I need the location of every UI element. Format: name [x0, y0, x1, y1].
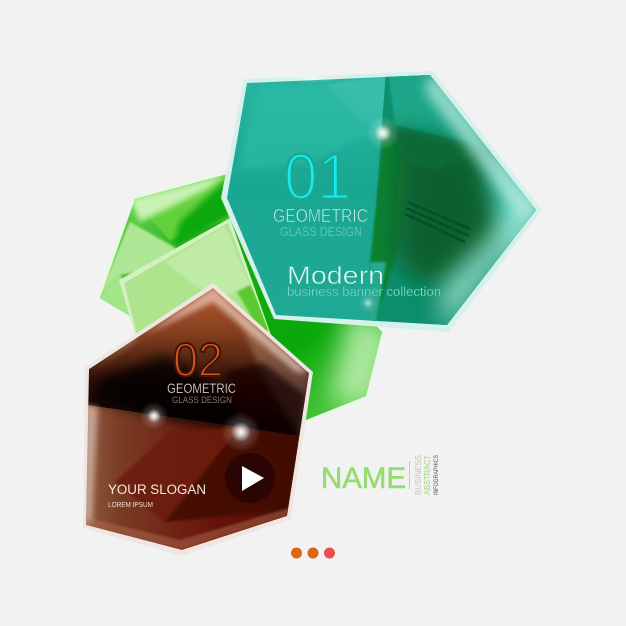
text: ABSTRACT: ABSTRACT	[422, 455, 432, 495]
lens flare: top right	[366, 116, 400, 150]
lens flare: top edge	[284, 73, 340, 83]
heading: Modern: Modern	[287, 262, 384, 290]
glass reflection facets	[240, 319, 309, 436]
panel: teal hexagon 01	[221, 70, 560, 340]
text: business banner collection: business banner collection	[287, 284, 441, 299]
lens flare: left	[140, 402, 168, 430]
number 02: 02	[173, 333, 223, 386]
subheading: GLASS DESIGN: GLASS DESIGN	[172, 395, 232, 406]
text: NAME: NAME	[321, 462, 406, 495]
text: BUSINESS: BUSINESS	[413, 455, 423, 495]
heading: GEOMETRIC: GEOMETRIC	[167, 380, 236, 396]
dark band shadow	[95, 355, 304, 437]
logo: NAME	[321, 454, 440, 495]
heading: YOUR SLOGAN: YOUR SLOGAN	[108, 482, 206, 497]
panel: green back hexagon	[98, 172, 395, 421]
text: LOREM IPSUM: LOREM IPSUM	[108, 502, 153, 509]
lens flare: centre	[221, 412, 261, 452]
text: INFOGRAPHICS: INFOGRAPHICS	[433, 454, 440, 495]
icon: play button	[225, 453, 275, 503]
glass reflection facets	[328, 77, 386, 128]
heading: GEOMETRIC: GEOMETRIC	[273, 206, 368, 226]
pagination dots	[291, 548, 335, 558]
subheading: GLASS DESIGN: GLASS DESIGN	[280, 225, 362, 239]
panel: light green glass pane	[119, 218, 271, 334]
icon: three diagonal lines	[405, 202, 470, 242]
number 01: 01	[284, 140, 351, 213]
panel: brown hexagon 02	[83, 283, 313, 556]
lens flare: bottom	[358, 293, 378, 313]
